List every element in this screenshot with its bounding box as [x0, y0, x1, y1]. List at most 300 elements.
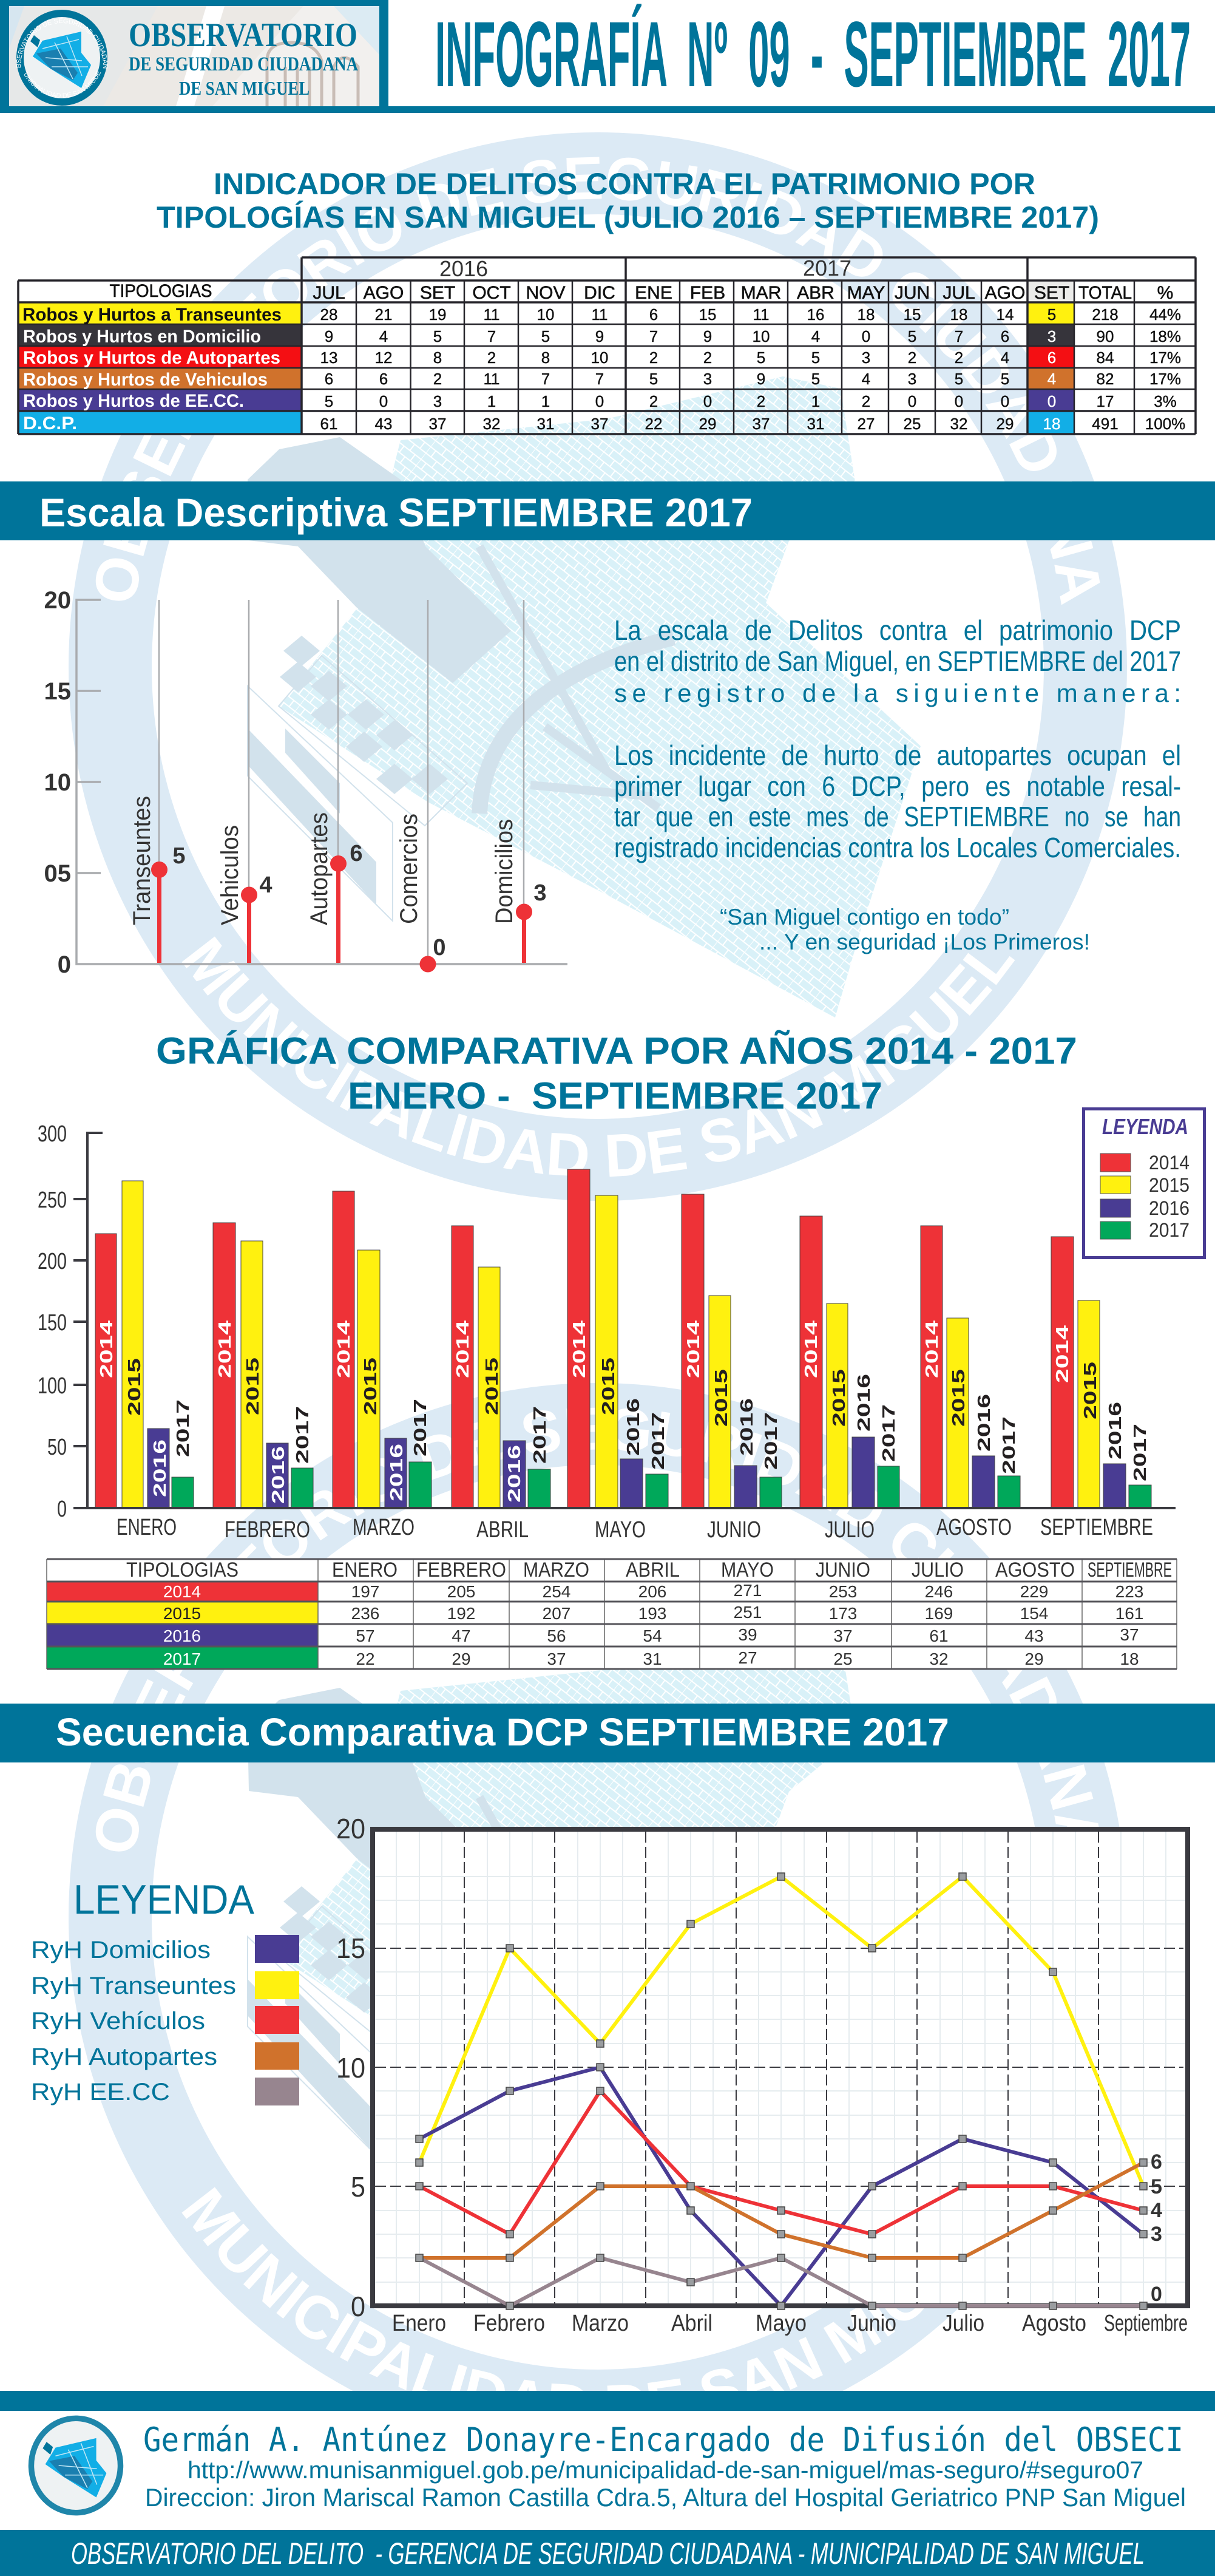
- row: transeuntes: [320, 305, 1181, 324]
- row: domicilio: 7: [649, 327, 658, 345]
- lollipop: Vehiculos 4: Vehiculos: [217, 825, 243, 925]
- month headers: TIPOLOGIAS: [109, 281, 212, 301]
- line chart: secuencia comparativa: [336, 1813, 1188, 2336]
- year labels on bars: 2015: [712, 1369, 731, 1427]
- row: domicilio: 9: [595, 327, 604, 345]
- logo wordmark: DE SEGURIDAD CIUDADANA: [129, 53, 358, 75]
- table header: AGOSTO: [995, 1558, 1075, 1582]
- row: domicilio: 7: [487, 327, 496, 345]
- row: autopartes: 13: [320, 348, 337, 367]
- row: vehiculos: 5: [955, 370, 963, 388]
- row: vehiculos: 5: [811, 370, 820, 388]
- y axis labels: [38, 1121, 67, 1522]
- row 2017: 37: [547, 1650, 566, 1668]
- background watermark: observatory seal (bottom): MUNICIPALIDAD DE SAN MIGUEL: [182, 2187, 924, 2391]
- row 2014: [163, 1581, 1143, 1601]
- year labels on bars: 2015: [361, 1358, 381, 1415]
- row: domicilio: 6: [1001, 327, 1009, 345]
- year labels on bars: 2017: [762, 1412, 781, 1470]
- row: EE.CC.: 1: [811, 392, 820, 410]
- row: vehiculos: 82: [1097, 370, 1114, 388]
- y axis labels: [336, 1813, 365, 2322]
- table header: FEBRERO: [416, 1558, 506, 1582]
- row 2017: 22: [356, 1650, 375, 1668]
- row: EE.CC.: 3%: [1154, 392, 1177, 410]
- table header: MAYO: [721, 1558, 774, 1582]
- row: EE.CC.: 0: [1001, 392, 1009, 410]
- month labels: SEPTIEMBRE: [1040, 1515, 1153, 1540]
- year headers: 2017: [803, 256, 851, 280]
- year labels on bars: 2014: [1053, 1325, 1072, 1383]
- x axis labels: Mayo: [756, 2311, 807, 2336]
- year labels on bars: 2016: [505, 1445, 524, 1503]
- y axis labels: 150: [38, 1310, 67, 1336]
- lollipop: Vehiculos 4: 4: [259, 872, 272, 898]
- header logo box: [0, 0, 388, 106]
- row 2015: [163, 1603, 1143, 1623]
- row 2014: 205: [447, 1582, 475, 1601]
- month headers: ENE: [635, 283, 672, 303]
- axis numbers: 10: [44, 769, 71, 796]
- contact text: http://www.munisanmiguel.gob.pe/municipalidad-de-san-miguel/mas-seguro/#seguro07: [188, 2457, 1143, 2484]
- row: domicilio: 10: [753, 327, 770, 345]
- month labels: ENERO: [117, 1515, 177, 1540]
- row labels: [22, 305, 282, 433]
- row: EE.CC.: 0: [595, 392, 604, 410]
- row 2015: 251: [734, 1603, 762, 1622]
- row: EE.CC.: 5: [325, 392, 333, 410]
- row: EE.CC.: [325, 392, 1177, 410]
- row: domicilio: 18%: [1149, 327, 1181, 345]
- row: vehiculos: 11: [483, 370, 500, 388]
- end values: [1151, 2150, 1162, 2306]
- bars: abril: [452, 1226, 550, 1508]
- logo wordmark: DE SAN MIGUEL: [179, 77, 310, 99]
- x axis labels: Febrero: [473, 2311, 545, 2336]
- row: D.C.P. totals: 31: [807, 415, 824, 433]
- month headers: MAR: [741, 283, 781, 303]
- row: vehiculos: 2: [433, 370, 442, 388]
- year labels on bars: 2017: [1000, 1416, 1019, 1474]
- x axis labels: Junio: [847, 2311, 896, 2336]
- row: EE.CC.: 17: [1097, 392, 1114, 410]
- row: D.C.P. totals: 100%: [1145, 415, 1185, 433]
- bars: julio: [800, 1216, 899, 1508]
- row 2014: 254: [543, 1582, 570, 1601]
- row: transeuntes: 10: [537, 305, 554, 324]
- month headers: [109, 281, 1173, 303]
- year labels on bars: 2014: [922, 1320, 942, 1378]
- y axis labels: 300: [38, 1121, 67, 1147]
- row: transeuntes: 28: [320, 305, 337, 324]
- lollipop: Vehiculos 4: [217, 825, 272, 963]
- lollipop: Comercios 0: 0: [433, 935, 446, 960]
- row: vehiculos: 17%: [1149, 370, 1181, 388]
- month labels: ABRIL: [476, 1517, 529, 1543]
- bars: septiembre: [1051, 1237, 1151, 1508]
- legend: bar chart: [1084, 1109, 1204, 1258]
- background watermark: observatory seal (bottom): OBSERVATORIO DE SEGURIDAD CIUDADANA: [96, 1407, 1098, 1852]
- year labels on bars: 2014: [334, 1320, 354, 1378]
- row: D.C.P. totals: 43: [375, 415, 392, 433]
- year headers: [439, 256, 851, 281]
- row: EE.CC.: 0: [703, 392, 712, 410]
- legend: line chart: RyH Domicilios: [31, 1937, 211, 1963]
- series: EE.CC: [419, 2258, 1143, 2306]
- row: EE.CC.: 0: [908, 392, 916, 410]
- circular seal logo: [16, 10, 108, 106]
- year labels on bars: 2016: [855, 1374, 874, 1432]
- legend: line chart: RyH Transeuntes: [31, 1973, 236, 1999]
- row: vehiculos: [325, 370, 1181, 388]
- chart axes: [76, 600, 567, 964]
- footer: [0, 2391, 1215, 2576]
- row: vehiculos: 3: [703, 370, 712, 388]
- row: transeuntes: 5: [1047, 305, 1056, 324]
- row: transeuntes: 11: [591, 305, 608, 324]
- bars: mayo: [567, 1169, 668, 1508]
- row 2014: 246: [925, 1582, 953, 1601]
- row: EE.CC.: 2: [862, 392, 870, 410]
- row 2016: 39: [738, 1625, 757, 1644]
- row: D.C.P. totals: 61: [320, 415, 337, 433]
- month headers: JUN: [895, 283, 930, 303]
- row: autopartes: 84: [1097, 348, 1114, 367]
- year labels on bars: 2014: [570, 1320, 589, 1378]
- year labels on bars: 2015: [125, 1358, 144, 1416]
- month labels: [117, 1515, 1153, 1543]
- row: transeuntes: 218: [1092, 305, 1119, 324]
- year labels on bars: [97, 1320, 1150, 1504]
- table header: MARZO: [523, 1558, 589, 1582]
- year labels on bars: 2014: [684, 1320, 703, 1378]
- end values: 5: [1151, 2175, 1162, 2198]
- y axis labels: 250: [38, 1188, 67, 1213]
- row: D.C.P. totals: 18: [1043, 415, 1060, 433]
- legend: bar chart: 2014: [1149, 1152, 1190, 1174]
- row: transeuntes: 21: [375, 305, 392, 324]
- row: vehiculos: 7: [595, 370, 604, 388]
- x axis labels: Abril: [671, 2311, 712, 2336]
- year headers: 2016: [439, 256, 488, 281]
- row 2014: 223: [1115, 1582, 1143, 1601]
- lollipop: Transeuntes 5: Transeuntes: [129, 796, 155, 925]
- month headers: NOV: [526, 283, 566, 303]
- footer seal logo: [29, 2416, 123, 2515]
- row: autopartes: 2: [908, 348, 916, 367]
- y axis labels: 0: [57, 1497, 67, 1522]
- row 2017: 27: [738, 1648, 757, 1667]
- table header: ENERO: [332, 1558, 398, 1582]
- header band: [0, 0, 1215, 113]
- row: transeuntes: 16: [807, 305, 824, 324]
- row 2017: 29: [1024, 1650, 1044, 1668]
- row 2017: 29: [452, 1650, 471, 1668]
- year labels on bars: 2015: [830, 1369, 849, 1427]
- row: D.C.P. totals: 22: [645, 415, 662, 433]
- legend: line chart: [31, 1877, 299, 2105]
- heading: grafica comparativa: ENERO - SEPTIEMBRE 2017: [348, 1075, 882, 1117]
- row 2014: 206: [638, 1582, 666, 1601]
- contact text: Direccion: Jiron Mariscal Ramon Castilla Cdra.5, Altura del Hospital Geriatrico PNP San Miguel: [145, 2483, 1186, 2512]
- month labels: JUNIO: [707, 1517, 761, 1543]
- year labels on bars: 2017: [530, 1406, 550, 1464]
- row: domicilio: 9: [703, 327, 712, 345]
- y axis labels: 0: [351, 2291, 365, 2322]
- row: autopartes: 10: [591, 348, 608, 367]
- bars: enero: [95, 1181, 194, 1508]
- bar chart: comparativa por años: [38, 1121, 1176, 1543]
- y axis labels: 10: [336, 2052, 365, 2084]
- year labels on bars: 2017: [411, 1399, 430, 1456]
- quote: San Miguel contigo en todo: [720, 905, 1090, 954]
- x axis labels: Marzo: [572, 2311, 629, 2336]
- text block: descripcion de la escala: se registro de la siguiente manera:: [614, 679, 1181, 707]
- lollipop: Domicilios 3: 3: [533, 880, 547, 906]
- month headers: DIC: [584, 283, 615, 303]
- month headers: %: [1157, 283, 1173, 303]
- y axis labels: 200: [38, 1249, 67, 1274]
- row: autopartes: 4: [1001, 348, 1009, 367]
- month headers: FEB: [690, 283, 725, 303]
- row: autopartes: 5: [811, 348, 820, 367]
- row: transeuntes: 15: [699, 305, 716, 324]
- year labels on bars: 2017: [879, 1404, 899, 1462]
- lollipop: Domicilios 3: Domicilios: [491, 819, 518, 924]
- x axis labels: Agosto: [1022, 2311, 1086, 2336]
- background watermark: observatory seal (bottom): [69, 1383, 1119, 2391]
- x axis labels: Enero: [392, 2311, 446, 2336]
- section band: secuencia comparativa: [0, 1704, 1215, 1762]
- year labels on bars: 2014: [802, 1320, 821, 1378]
- table: totales por año y mes: [47, 1558, 1177, 1669]
- month labels: AGOSTO: [936, 1515, 1012, 1540]
- row: D.C.P. totals: 37: [429, 415, 446, 433]
- row: vehiculos: 6: [379, 370, 388, 388]
- legend: line chart: RyH Autopartes: [31, 2044, 217, 2070]
- row: domicilio: 0: [862, 327, 870, 345]
- row labels: Robos y Hurtos de Autopartes: [23, 348, 280, 368]
- row 2016: 2016: [163, 1626, 201, 1645]
- row: autopartes: 2: [955, 348, 963, 367]
- row: domicilio: 5: [541, 327, 550, 345]
- row: EE.CC.: 3: [433, 392, 442, 410]
- row: autopartes: 5: [757, 348, 765, 367]
- month labels: FEBRERO: [225, 1517, 310, 1543]
- row: D.C.P. totals: 27: [858, 415, 875, 433]
- legend: bar chart: LEYENDA: [1102, 1114, 1188, 1139]
- row: transeuntes: 15: [904, 305, 921, 324]
- row: domicilio: 5: [908, 327, 916, 345]
- month headers: MAY: [847, 283, 885, 303]
- row labels: Robos y Hurtos de Vehiculos: [23, 370, 268, 390]
- year labels on bars: 2016: [1106, 1402, 1125, 1460]
- row 2016: 54: [643, 1626, 662, 1645]
- legend: bar chart: 2015: [1149, 1174, 1190, 1196]
- row 2014: 229: [1020, 1582, 1048, 1601]
- bottom band: [0, 2530, 1215, 2576]
- row 2017: 32: [929, 1650, 949, 1668]
- row: autopartes: 17%: [1149, 348, 1181, 367]
- text block: descripcion de la escala: [614, 614, 1181, 863]
- bars: febrero: [213, 1223, 313, 1508]
- table header: TIPOLOGIAS: [126, 1558, 239, 1582]
- row 2017: 31: [643, 1650, 662, 1668]
- end values: 4: [1151, 2199, 1162, 2222]
- row: domicilio: 90: [1097, 327, 1114, 345]
- row 2016: 37: [833, 1626, 853, 1645]
- row: domicilio: 5: [433, 327, 442, 345]
- year labels on bars: 2014: [97, 1320, 117, 1378]
- row 2016: 47: [452, 1626, 471, 1645]
- row: domicilio: 9: [325, 327, 333, 345]
- row: EE.CC.: 0: [1047, 392, 1056, 410]
- row: autopartes: [320, 348, 1181, 367]
- row 2016: 56: [547, 1626, 566, 1645]
- row: domicilio: 4: [811, 327, 820, 345]
- row: autopartes: 2: [649, 348, 658, 367]
- row: transeuntes: 11: [483, 305, 500, 324]
- table: tipologias por mes 2016-2017: [18, 256, 1196, 434]
- row: domicilio: 3: [1047, 327, 1056, 345]
- lollipop: Autopartes 6: [306, 812, 363, 963]
- row: EE.CC.: 0: [955, 392, 963, 410]
- year labels on bars: 2015: [949, 1369, 969, 1427]
- y axis labels: 15: [336, 1932, 365, 1964]
- axis numbers: 05: [44, 860, 71, 887]
- row: EE.CC.: 2: [649, 392, 658, 410]
- row: transeuntes: 6: [649, 305, 658, 324]
- row: domicilio: 4: [379, 327, 388, 345]
- month labels: JULIO: [825, 1517, 875, 1543]
- heading: grafica comparativa: GRÁFICA COMPARATIVA POR AÑOS 2014 - 2017: [156, 1030, 1077, 1072]
- row 2014: 197: [351, 1582, 379, 1601]
- heading: indicador de delitos: TIPOLOGÍAS EN SAN MIGUEL (JULIO 2016 – SEPTIEMBRE 2017): [157, 200, 1099, 234]
- row: D.C.P. totals: 32: [483, 415, 500, 433]
- row: vehiculos: 3: [908, 370, 916, 388]
- row: D.C.P. totals: 29: [699, 415, 716, 433]
- lollipop chart: escala descriptiva: [44, 587, 567, 978]
- row 2015: 193: [638, 1604, 666, 1623]
- end values: 3: [1151, 2223, 1162, 2246]
- month headers: SET: [420, 283, 455, 303]
- row: autopartes: 6: [1047, 348, 1056, 367]
- row: vehiculos: 4: [1047, 370, 1056, 388]
- row: EE.CC.: 0: [379, 392, 388, 410]
- row 2015: 236: [351, 1604, 379, 1623]
- row: autopartes: 12: [375, 348, 392, 367]
- row 2014: 253: [829, 1582, 857, 1601]
- row: transeuntes: 11: [753, 305, 770, 324]
- lollipop: Transeuntes 5: [129, 796, 186, 963]
- heading: grafica comparativa: [156, 1030, 1077, 1117]
- row 2016: 43: [1024, 1626, 1044, 1645]
- month headers: JUL: [943, 283, 975, 303]
- legend: bar chart: 2017: [1149, 1219, 1190, 1241]
- table header: JULIO: [912, 1558, 964, 1582]
- month headers: TOTAL: [1078, 283, 1132, 303]
- logo wordmark: OBSERVATORIO: [129, 16, 357, 54]
- background watermark: observatory seal (top): [69, 132, 1127, 1201]
- year labels on bars: 2017: [1131, 1424, 1150, 1481]
- year labels on bars: 2016: [151, 1439, 170, 1497]
- quote: San Miguel contigo en todo: ... Y en seguridad ¡Los Primeros!: [759, 929, 1090, 954]
- x axis labels: [392, 2311, 1188, 2336]
- row: EE.CC.: 1: [541, 392, 550, 410]
- row: D.C.P. totals: [320, 415, 1185, 433]
- month labels: MARZO: [353, 1515, 415, 1540]
- background watermark: observatory seal (top): MUNICIPALIDAD DE SAN MIGUEL: [182, 936, 1015, 1177]
- year labels on bars: 2016: [737, 1398, 757, 1456]
- month headers: ABR: [797, 283, 834, 303]
- row: transeuntes: 14: [997, 305, 1014, 324]
- row 2017: 25: [833, 1650, 853, 1668]
- row: vehiculos: 5: [649, 370, 658, 388]
- data markers: [416, 1873, 1147, 2309]
- year labels on bars: 2015: [243, 1358, 263, 1415]
- row 2016: 61: [929, 1626, 949, 1645]
- table header: JUNIO: [816, 1558, 870, 1582]
- row 2014: 271: [734, 1581, 762, 1600]
- lollipop: Domicilios 3: [491, 819, 547, 963]
- year labels on bars: 2016: [975, 1394, 994, 1452]
- legend: line chart: RyH Vehículos: [31, 2008, 205, 2034]
- quote: San Miguel contigo en todo: “San Miguel contigo en todo”: [720, 905, 1009, 929]
- row: D.C.P. totals: 37: [753, 415, 770, 433]
- year labels on bars: 2016: [624, 1398, 643, 1456]
- lollipop: Comercios 0: [396, 814, 446, 973]
- year labels on bars: 2014: [453, 1320, 473, 1378]
- row 2017: [163, 1648, 1139, 1668]
- row 2015: 2015: [163, 1604, 201, 1623]
- year labels on bars: 2015: [482, 1358, 502, 1415]
- row 2015: 154: [1020, 1604, 1048, 1623]
- section band: escala descriptiva: [0, 481, 1215, 540]
- contact text: [143, 2421, 1186, 2512]
- year labels on bars: 2014: [215, 1320, 235, 1378]
- year labels on bars: 2017: [174, 1399, 193, 1457]
- axis numbers: [44, 587, 71, 978]
- row 2015: 161: [1115, 1604, 1143, 1623]
- logo wordmark: [129, 16, 358, 99]
- row: transeuntes: 44%: [1149, 305, 1181, 324]
- month headers: SET: [1034, 283, 1069, 303]
- row 2016: [163, 1625, 1139, 1645]
- month headers: JUL: [313, 283, 345, 303]
- row: D.C.P. totals: 25: [904, 415, 921, 433]
- row 2016: 57: [356, 1626, 375, 1645]
- bars: marzo: [333, 1191, 432, 1508]
- row: D.C.P. totals: 37: [591, 415, 608, 433]
- row: EE.CC.: 2: [757, 392, 765, 410]
- month headers: AGO: [364, 283, 404, 303]
- end values: 0: [1151, 2283, 1162, 2306]
- year labels on bars: 2016: [269, 1446, 288, 1504]
- row 2014: 2014: [163, 1582, 201, 1601]
- y axis labels: 5: [351, 2171, 365, 2203]
- row: autopartes: 2: [487, 348, 496, 367]
- lollipop: Autopartes 6: 6: [350, 841, 363, 866]
- row 2015: 173: [829, 1604, 857, 1623]
- section band: escala descriptiva: Escala Descriptiva SEPTIEMBRE 2017: [39, 490, 753, 535]
- lollipop: Comercios 0: Comercios: [396, 814, 422, 924]
- series: Autopartes: [419, 2163, 1143, 2258]
- lollipop: Autopartes 6: Autopartes: [306, 812, 333, 925]
- series: Domicilios: [419, 2067, 1143, 2306]
- row 2015: 207: [543, 1604, 570, 1623]
- row: vehiculos: 6: [325, 370, 333, 388]
- series: Transeuntes: [419, 1877, 1143, 2186]
